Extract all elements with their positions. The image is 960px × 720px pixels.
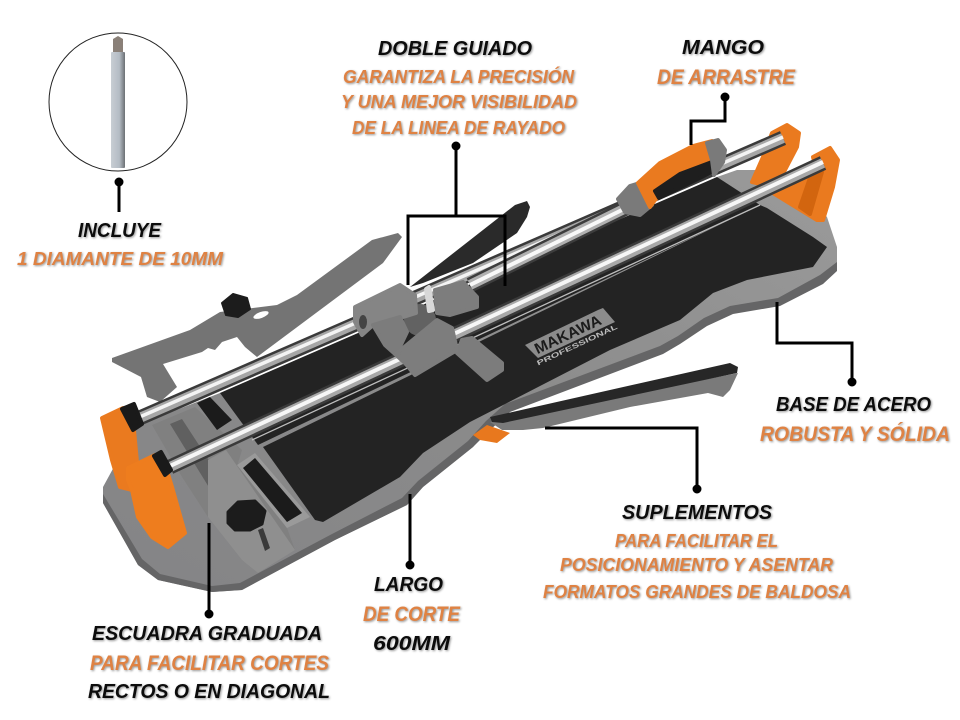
callout: suplementos [543, 501, 851, 602]
callout: escuadra graduada: RECTOS O EN DIAGONAL [88, 680, 330, 703]
callout: incluye: INCLUYE [78, 219, 162, 242]
callout: mango: DE ARRASTRE [657, 65, 796, 89]
callout: doble guiado [341, 37, 577, 138]
callout: incluye: 1 DIAMANTE DE 10MM [17, 248, 224, 269]
brand logo: PROFESSIONAL [536, 323, 620, 367]
callout: base de acero: BASE DE ACERO [776, 393, 931, 416]
knob: rear [222, 294, 250, 317]
sliding carriage [355, 282, 502, 380]
front black mat [263, 205, 827, 522]
callout: suplementos: POSICIONAMIENTO Y ASENTAR [560, 554, 834, 575]
tile cutter product illustration [102, 125, 838, 592]
callout: suplementos: SUPLEMENTOS [622, 501, 772, 524]
left orange supports [102, 404, 185, 547]
front black support arm [473, 363, 738, 443]
steel guide rods [135, 137, 823, 467]
leader: mango [691, 94, 728, 145]
callout: base de acero [760, 393, 950, 446]
callout: escuadra graduada: PARA FACILITAR CORTES [90, 651, 330, 675]
graduated square plate with rulers [152, 397, 310, 573]
brand logo [525, 308, 620, 367]
leader: largo [407, 494, 413, 568]
callout: largo de corte: 600MM [373, 632, 451, 655]
steel base [103, 170, 837, 592]
callout: suplementos: FORMATOS GRANDES DE BALDOSA [543, 581, 851, 602]
leader: base [777, 302, 855, 385]
callout: escuadra graduada [88, 622, 330, 703]
leader: doble guiado [408, 143, 505, 286]
right orange supports [752, 125, 838, 220]
rear black mat [220, 177, 760, 445]
callout: largo de corte [363, 573, 461, 655]
callout: incluye [17, 219, 224, 269]
callout: mango: MANGO [682, 36, 764, 59]
callout: largo de corte: DE CORTE [363, 602, 461, 626]
leader lines and dots [116, 94, 855, 617]
brand logo: MAKAWA [532, 312, 604, 358]
leader: escuadra [206, 523, 212, 617]
drag handle [618, 140, 725, 215]
callout: suplementos: PARA FACILITAR EL [615, 530, 778, 551]
callout: doble guiado: GARANTIZA LA PRECISIÓN [343, 66, 575, 87]
inset: diamond wheel in circle [49, 33, 187, 171]
callout: mango [657, 36, 796, 89]
callout: doble guiado: DOBLE GUIADO [378, 37, 532, 60]
knob: front [228, 501, 265, 530]
callout: largo de corte: LARGO [374, 573, 443, 596]
rear black support arm [410, 201, 530, 287]
callout: escuadra graduada: ESCUADRA GRADUADA [92, 622, 322, 645]
callout: doble guiado: DE LA LINEA DE RAYADO [352, 117, 566, 138]
leader: suplementos [545, 428, 700, 492]
callout: doble guiado: Y UNA MEJOR VISIBILIDAD [341, 91, 577, 112]
leader: incluye [116, 179, 122, 212]
left adjustable square arm [112, 233, 402, 402]
